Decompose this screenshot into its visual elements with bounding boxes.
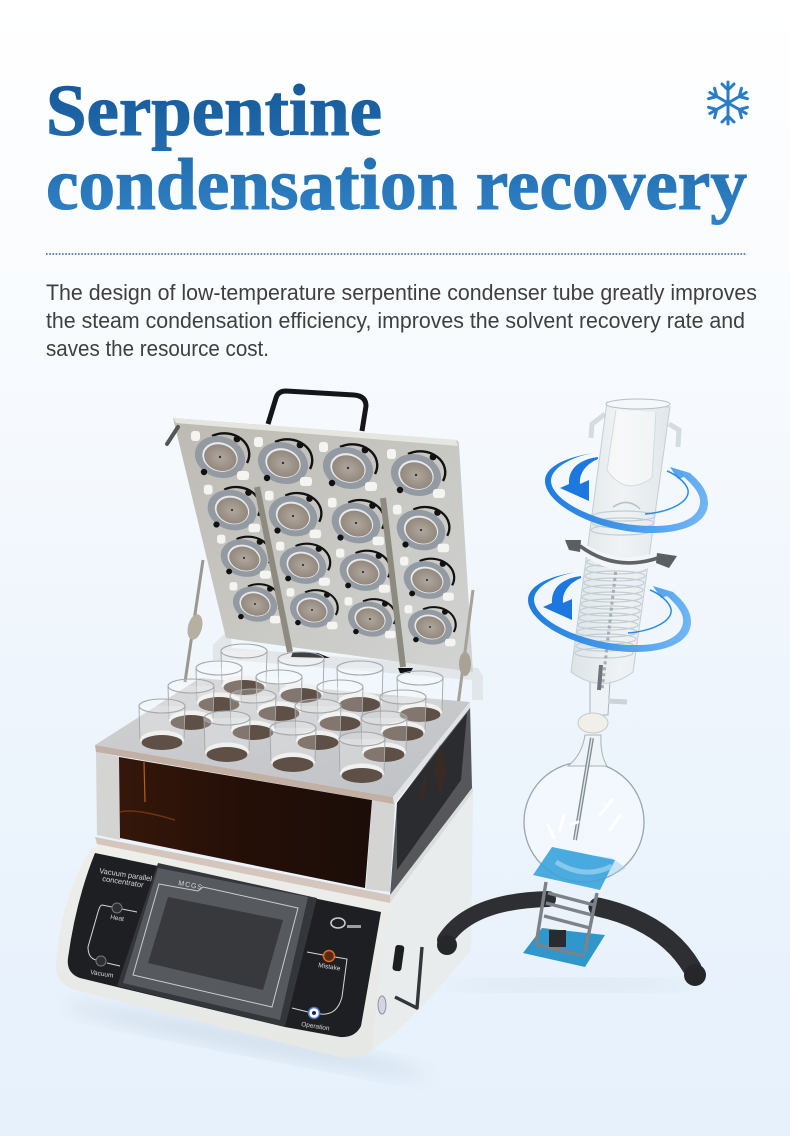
top plate	[95, 678, 470, 797]
panel button lines	[88, 903, 347, 1014]
title: Serpentine	[46, 70, 382, 151]
description text	[46, 280, 757, 361]
rotation arrows: upper	[545, 453, 708, 533]
product: vacuum parallel concentrator	[56, 391, 483, 1085]
lid bars	[257, 487, 290, 652]
side latch	[418, 745, 447, 798]
control panel	[68, 853, 381, 1037]
clamp	[579, 540, 658, 571]
lid handle	[268, 391, 366, 431]
beakers	[139, 644, 443, 783]
stand	[437, 899, 706, 990]
panel labels: Operation	[301, 1021, 330, 1033]
chamber	[95, 644, 473, 903]
indicator buttons	[324, 950, 334, 962]
condenser tube	[565, 399, 679, 690]
serpentine coil	[575, 511, 655, 690]
machine base	[56, 790, 473, 1058]
rotation arrows: lower	[528, 572, 691, 652]
flask	[524, 735, 644, 882]
description text: the steam condensation efficiency, improves the solvent recovery rate and	[46, 308, 745, 333]
lower tube and joint	[578, 680, 627, 733]
panel labels: Vacuum	[90, 969, 114, 980]
open lid	[167, 418, 473, 673]
panel labels	[90, 866, 341, 1033]
description text: saves the resource cost.	[46, 336, 269, 361]
icon: snowflake	[707, 82, 749, 124]
panel labels: concentrator	[102, 874, 145, 890]
amber glass window	[119, 757, 372, 888]
lab jack	[523, 847, 615, 967]
touch screen	[148, 897, 283, 990]
description text: The design of low-temperature serpentine condenser tube greatly improves	[46, 280, 757, 305]
stay arms	[185, 560, 203, 682]
side switch and antenna	[392, 945, 405, 972]
product: serpentine condenser glassware	[437, 399, 708, 990]
panel labels: Vacuum parallel	[99, 866, 153, 883]
title	[46, 70, 747, 225]
hinge rail	[213, 628, 483, 700]
brand logo	[331, 918, 345, 928]
panel labels: MCGS	[178, 880, 203, 892]
panel labels: Mistake	[318, 962, 341, 973]
gasket array	[189, 430, 457, 650]
title: condensation recovery	[46, 144, 747, 225]
panel labels: Heat	[110, 914, 125, 923]
